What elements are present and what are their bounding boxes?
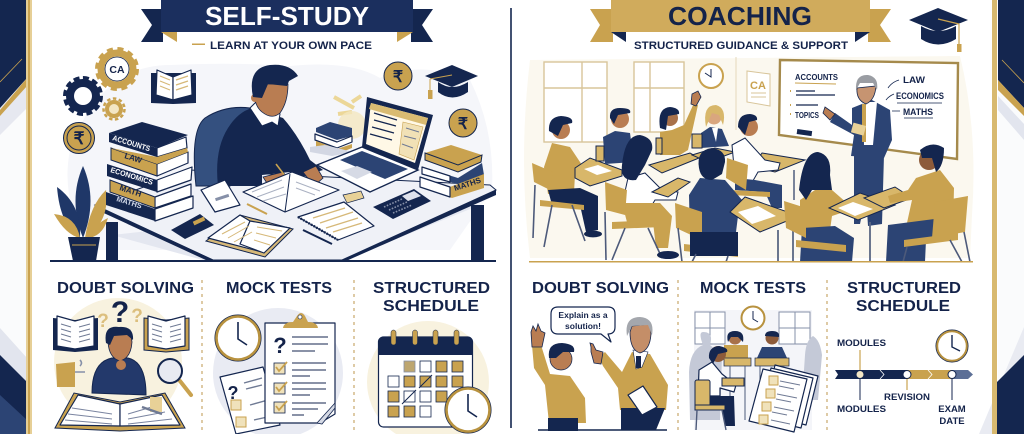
clock, timeline <box>936 330 968 362</box>
clock <box>742 306 764 330</box>
timeline labels: MODULES <box>837 404 886 415</box>
whiteboard: ECONOMICS <box>896 91 944 101</box>
silhouettes <box>689 332 822 420</box>
panel: structured schedule, self-study <box>367 321 491 434</box>
heading: mock tests: MOCK TESTS <box>226 280 332 297</box>
CA poster: CA <box>750 80 766 92</box>
book: accounts: ACCOUNTS <box>111 133 151 153</box>
title: self-study: SELF-STUDY <box>205 1 369 31</box>
question marks: ? <box>97 311 109 332</box>
illustration: classroom scene <box>524 56 974 262</box>
magnifier <box>158 359 191 395</box>
timeline labels: DATE <box>939 416 965 427</box>
heading: mock tests, coaching: MOCK TESTS <box>700 280 806 297</box>
clock <box>445 387 491 433</box>
illustration: self-study desk scene <box>50 49 496 262</box>
title: coaching: COACHING <box>668 1 812 31</box>
student: blazer <box>692 105 729 148</box>
book: math: MATH <box>118 183 143 199</box>
timeline labels: MODULES <box>837 338 886 349</box>
desks <box>724 358 789 420</box>
banner: self-study <box>141 0 433 42</box>
window <box>634 62 684 132</box>
panel: mock tests, self-study <box>213 308 343 434</box>
calculator <box>373 189 431 219</box>
right decorative border <box>979 0 1024 434</box>
heading: structured schedule, self-study: STRUCTURED <box>373 280 490 297</box>
timeline <box>835 338 973 427</box>
student: gold jumper <box>532 116 602 247</box>
divider line, self-study <box>201 280 203 434</box>
clock <box>215 315 261 361</box>
eraser <box>343 191 364 203</box>
icon: coin: ₹ <box>458 116 468 133</box>
question marks <box>97 296 143 332</box>
floor line <box>538 429 667 431</box>
book: maths: MATHS <box>115 194 143 211</box>
timeline labels <box>837 338 966 427</box>
icon: open book <box>151 70 196 104</box>
right book stack: MATHS <box>453 176 483 193</box>
desk <box>652 178 690 197</box>
icon: graduation cap, coaching <box>909 8 968 52</box>
desks right <box>829 187 912 262</box>
test papers <box>749 365 818 432</box>
window <box>695 312 725 344</box>
panel: doubt solving, self-study <box>53 296 191 431</box>
book: economics: ECONOMICS <box>109 165 154 187</box>
desk <box>730 197 799 262</box>
pen <box>247 204 267 214</box>
open book <box>53 316 98 352</box>
wall clock <box>699 64 723 88</box>
chair <box>194 107 250 186</box>
large open book <box>55 393 185 431</box>
panel: doubt solving, coaching <box>531 307 668 431</box>
small book stack <box>310 122 353 156</box>
glow <box>334 96 366 139</box>
gear: CA <box>97 49 137 89</box>
open notebook under hand <box>243 172 339 212</box>
heading: doubt solving: DOUBT SOLVING <box>57 280 194 297</box>
whiteboard <box>779 60 958 159</box>
desk <box>575 158 622 186</box>
laptop <box>317 97 433 192</box>
student at desk <box>217 65 323 188</box>
heading: structured schedule, coaching <box>847 280 961 315</box>
clipboard: ? <box>273 333 287 358</box>
speech bubble: solution! <box>565 321 601 331</box>
icon: coin <box>384 62 412 90</box>
desk <box>50 170 496 262</box>
student: raising hand <box>656 91 701 155</box>
whiteboard: LAW <box>903 75 926 85</box>
icon: coin: ₹ <box>393 69 403 86</box>
heading: doubt solving, coaching: DOUBT SOLVING <box>532 280 669 297</box>
subtitle: coaching: STRUCTURED GUIDANCE & SUPPORT <box>634 40 848 52</box>
heading: structured schedule, coaching: STRUCTURED <box>847 280 961 297</box>
student <box>531 324 586 431</box>
heading: structured schedule, coaching: SCHEDULE <box>856 298 950 315</box>
window <box>779 312 810 344</box>
whiteboard: TOPICS <box>795 111 820 120</box>
student: blue shirt <box>596 108 634 164</box>
navy notebook <box>171 214 214 239</box>
banner: coaching <box>590 0 891 42</box>
gear: small gold <box>104 98 124 120</box>
panel: mock tests, coaching <box>689 306 822 432</box>
centre divider <box>510 8 512 428</box>
left decorative border <box>0 0 32 434</box>
icon: coin <box>64 122 94 154</box>
window <box>544 62 607 142</box>
student in navy <box>757 331 787 358</box>
thinking student <box>92 327 146 395</box>
student: right gold <box>886 144 970 262</box>
heading: structured schedule, self-study: SCHEDULE <box>383 298 479 315</box>
student: white shirt <box>726 114 782 208</box>
student in gold <box>724 331 748 359</box>
question marks: ? <box>131 306 143 327</box>
plant <box>54 166 108 261</box>
teacher <box>823 75 892 226</box>
right book stack <box>420 145 484 198</box>
student: navy back <box>675 148 758 262</box>
student: woman gold <box>784 152 854 262</box>
CA poster <box>747 71 770 106</box>
timeline labels: REVISION <box>884 392 930 403</box>
icon: graduation cap <box>425 65 478 99</box>
timeline labels: EXAM <box>938 404 966 415</box>
background blob <box>68 64 492 250</box>
notepad <box>201 180 240 212</box>
book: law: LAW <box>123 151 143 165</box>
floor line <box>529 261 973 262</box>
note <box>56 360 85 387</box>
open book <box>144 316 189 352</box>
spiral notebook <box>298 202 374 240</box>
teacher <box>590 317 668 430</box>
gear: CA: CA <box>109 64 125 76</box>
gear: navy <box>65 78 101 114</box>
back test paper: ? <box>228 383 238 403</box>
board text: ACCOUNTS <box>795 72 838 82</box>
whiteboard: MATHS <box>903 107 933 117</box>
desks back row <box>649 148 805 200</box>
speech bubble <box>551 307 615 342</box>
background <box>524 56 974 258</box>
pen <box>303 230 332 244</box>
open book on desk <box>206 215 293 257</box>
icon: coin <box>449 109 477 137</box>
heading: structured schedule, self-study <box>373 280 490 315</box>
calendar <box>378 330 472 427</box>
student: woman white shirt <box>605 135 679 260</box>
icon: coin: ₹ <box>74 129 85 148</box>
question marks: ? <box>111 296 129 329</box>
book stack <box>106 122 193 221</box>
foreground student <box>695 346 744 430</box>
subtitle: self-study: LEARN AT YOUR OWN PACE <box>210 40 372 52</box>
speech bubble: Explain as a <box>558 310 608 320</box>
